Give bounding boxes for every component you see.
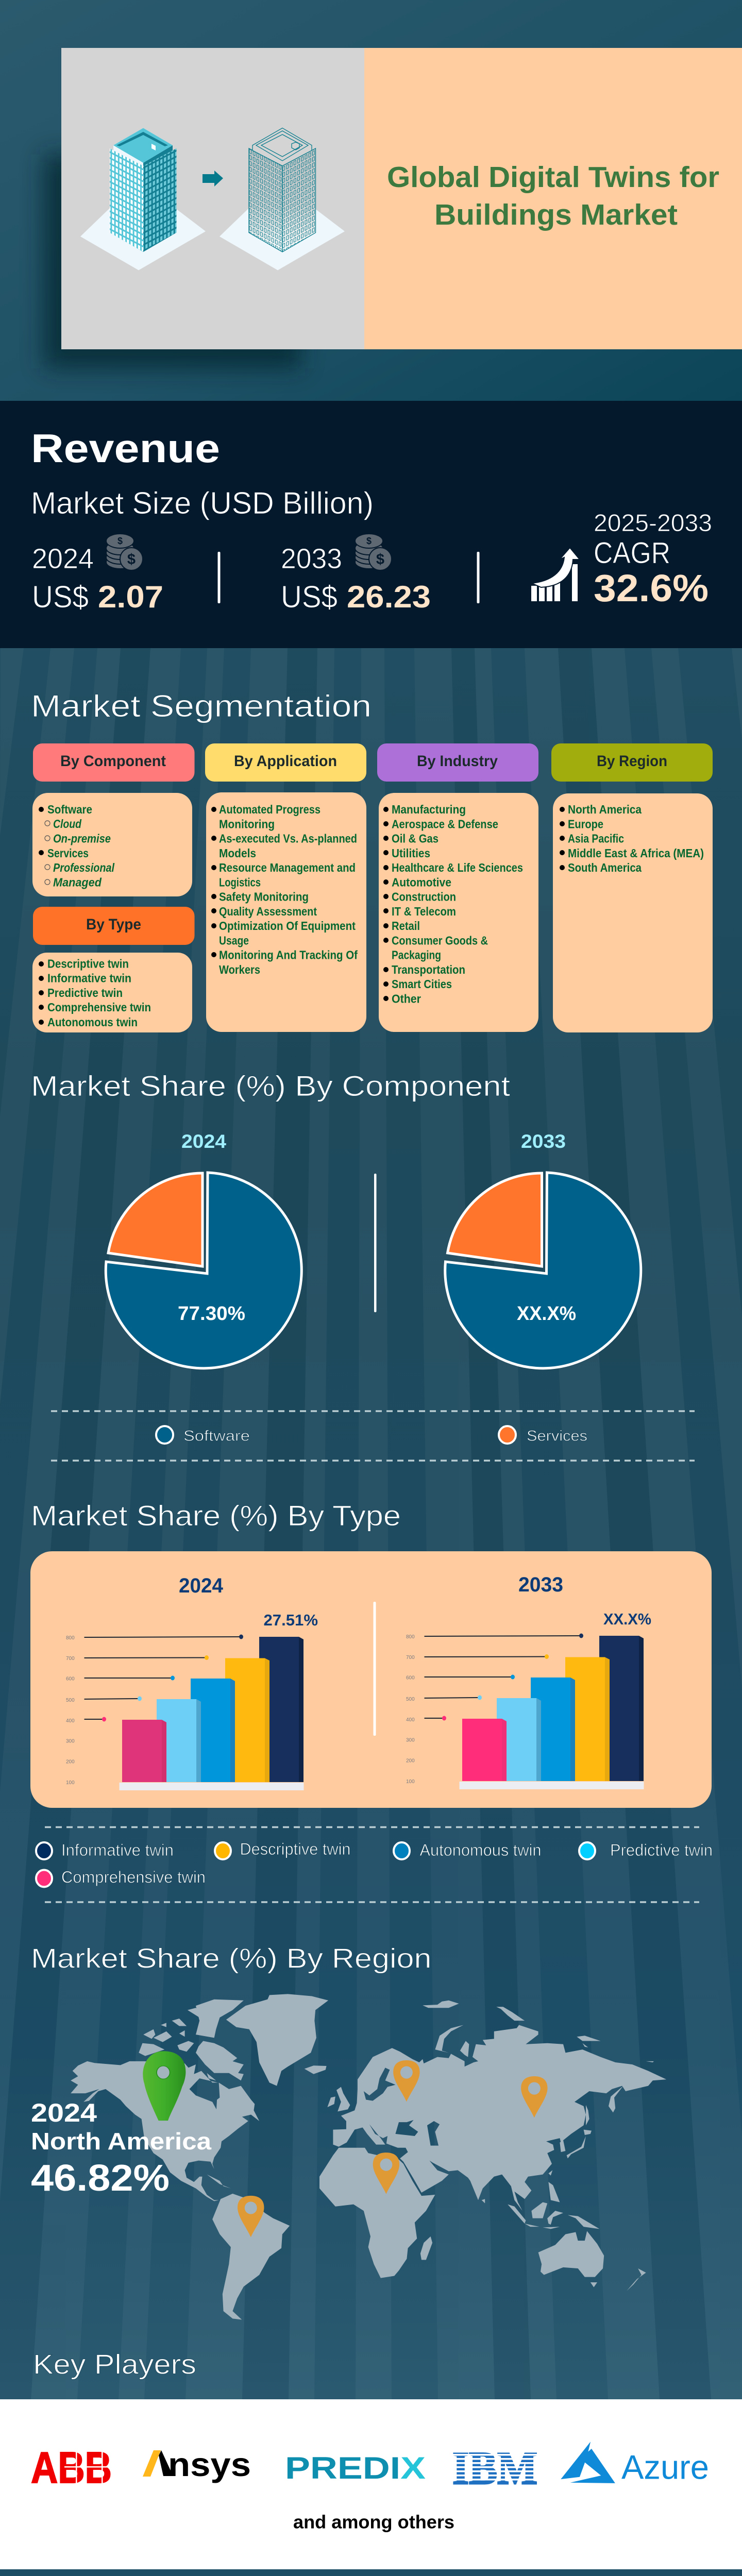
- chart: type bars 2024: 200: [66, 1759, 75, 1765]
- panel: by industry: Construction: [392, 890, 456, 904]
- panel: by component: By Component: [60, 753, 166, 770]
- icon: growth chart: [531, 548, 580, 601]
- panel: by application: Monitoring And Tracking Of: [219, 948, 358, 962]
- panel: by application: Usage: [219, 934, 249, 947]
- panel: by type: Descriptive twin: [47, 957, 129, 971]
- chart: type bars 2033: 400: [406, 1717, 415, 1723]
- panel: by application: Logistics: [219, 875, 261, 889]
- panel: by component: On-premise: [53, 832, 111, 845]
- legend: component: Services: [527, 1428, 587, 1445]
- chart: type bars 2033: XX.X%: [603, 1610, 651, 1628]
- callout: North America share: North America: [31, 2128, 211, 2155]
- heading: revenue: Revenue: [31, 426, 220, 471]
- panel: by application: By Application: [234, 753, 337, 770]
- icon: pin Middle East and Africa: [373, 2153, 399, 2194]
- stat: CAGR: 32.6%: [594, 567, 709, 609]
- panel: by application: Resource Management and: [219, 861, 356, 874]
- legend: type: Informative twin: [61, 1841, 174, 1859]
- map: world: [71, 1994, 666, 2319]
- subheading: market size: Market Size (USD Billion): [31, 486, 374, 520]
- heading: market share by region: Market Share (%) By Region: [31, 1943, 432, 1974]
- panel: by component: Professional: [53, 861, 115, 874]
- panel: by type: Predictive twin: [47, 986, 123, 999]
- stat: 2033: [281, 543, 431, 614]
- stat: 2033: 26.23: [347, 580, 431, 614]
- icon: coins 2024: $: [127, 551, 136, 568]
- chart: type bars 2024: 100: [66, 1780, 75, 1786]
- chart: component pie 2024: [106, 1131, 301, 1368]
- chart: type bars 2024: 2024: [179, 1574, 224, 1597]
- icon: pin Asia: [521, 2076, 548, 2117]
- icon: pin South America: [238, 2196, 264, 2237]
- panel: by industry: Healthcare & Life Sciences: [392, 861, 523, 874]
- panel: by region: North America: [568, 803, 642, 816]
- panel: by industry: [377, 743, 538, 1032]
- panel: by application: Workers: [219, 963, 260, 976]
- chart: component pie 2033: [445, 1131, 641, 1368]
- title: Buildings Market: [434, 198, 678, 231]
- chart: type bars 2024: 800: [66, 1635, 75, 1641]
- title: [387, 161, 719, 231]
- chart: type bars 2033: 300: [406, 1737, 415, 1743]
- panel: by application: Monitoring: [219, 817, 275, 831]
- icon: wireframe building: [220, 128, 345, 270]
- panel: by industry: Automotive: [392, 875, 451, 889]
- panel: by industry: Retail: [392, 919, 420, 933]
- panel: by application: As-executed Vs. As-planned: [219, 832, 357, 845]
- legend: type: [36, 1827, 713, 1902]
- panel: by application: Optimization Of Equipment: [219, 919, 356, 933]
- legend: component: [51, 1411, 695, 1461]
- divider: [374, 1174, 376, 1312]
- panel: by type: Informative twin: [47, 972, 131, 985]
- chart: type bars 2024: 700: [66, 1656, 75, 1662]
- legend: type: Comprehensive twin: [61, 1868, 206, 1887]
- panel: by component: Managed: [53, 875, 102, 889]
- banner shadow: [44, 155, 301, 368]
- panel: by application: Quality Assessment: [219, 905, 317, 918]
- panel: by application: Safety Monitoring: [219, 890, 309, 904]
- heading: key players: Key Players: [33, 2349, 196, 2380]
- chart: type bars 2024: 500: [66, 1698, 75, 1703]
- icon: pin Europe: [393, 2060, 420, 2102]
- callout: North America share: 46.82%: [31, 2158, 170, 2199]
- chart: type bars 2033: 700: [406, 1655, 415, 1660]
- panel: by region: Middle East & Africa (MEA): [568, 846, 704, 860]
- chart: type bars 2024: 300: [66, 1738, 75, 1744]
- panel: by type: [32, 907, 195, 1032]
- chart: type bars 2033: 800: [406, 1634, 415, 1640]
- chart: type bars 2024: 400: [66, 1718, 75, 1724]
- panel: by industry: Other: [392, 992, 421, 1005]
- icon: coins 2033: $: [376, 551, 384, 568]
- Americas and Greenland: [71, 1994, 328, 2319]
- heading: market share by component: Market Share (%) By Component: [31, 1070, 510, 1102]
- hero banner: [44, 48, 742, 368]
- chart: type bars 2033: 100: [406, 1779, 415, 1785]
- panel: by region: By Region: [597, 753, 667, 770]
- panel: by application: [205, 743, 366, 1032]
- panel: by component: Services: [47, 846, 89, 860]
- chart: component pie 2024: 2024: [181, 1131, 226, 1152]
- icon: solid building: [80, 128, 206, 270]
- icon: coins 2033: $: [366, 536, 372, 546]
- icon: coins 2024: [106, 534, 143, 570]
- callout: North America share: [31, 2098, 211, 2199]
- heading: market segmentation: Market Segmentation: [31, 689, 372, 723]
- legend: component: Software: [183, 1428, 250, 1445]
- panel: by type: Comprehensive twin: [47, 1001, 151, 1014]
- divider: [477, 552, 479, 603]
- panel: by region: Europe: [568, 817, 603, 831]
- panel: by type: Autonomous twin: [47, 1015, 138, 1029]
- legend: type: Predictive twin: [610, 1841, 713, 1859]
- stat: 2024: [32, 543, 163, 614]
- panel: by component: Cloud: [53, 817, 82, 831]
- icon: pin North America: [143, 2051, 185, 2121]
- icon: arrow: [203, 171, 223, 187]
- panel: by industry: Consumer Goods &: [392, 934, 488, 947]
- chart: type bars 2033: 2033: [518, 1573, 563, 1596]
- panel: revenue: [0, 401, 742, 648]
- legend: type: Autonomous twin: [419, 1841, 541, 1859]
- panel: by region: [551, 743, 713, 1032]
- chart: type bars 2024: 600: [66, 1676, 75, 1682]
- icon: coins 2024: $: [117, 536, 123, 546]
- panel: by component: [32, 743, 195, 896]
- panel: type charts: [30, 1551, 712, 1808]
- chart: type bars 2033: 200: [406, 1758, 415, 1764]
- panel: by industry: Aerospace & Defense: [392, 817, 498, 831]
- chart: component pie 2033: XX.X%: [517, 1303, 576, 1325]
- panel: by industry: Smart Cities: [392, 977, 452, 991]
- stat: 2024: US$: [32, 580, 89, 614]
- panel: by industry: Packaging: [392, 948, 441, 962]
- panel: by application: Models: [219, 846, 256, 860]
- panel: by region: South America: [568, 861, 642, 874]
- panel: by application: Automated Progress: [219, 803, 321, 816]
- chart: type bars 2033: [406, 1573, 651, 1789]
- divider: [373, 1602, 376, 1736]
- chart: type bars 2024: [66, 1574, 318, 1790]
- chart: component pie 2024: 77.30%: [178, 1303, 245, 1325]
- panel: by industry: Oil & Gas: [392, 832, 439, 845]
- legend: type: Descriptive twin: [240, 1840, 350, 1858]
- logo: Azure: [561, 2442, 709, 2486]
- divider band: [0, 2569, 742, 2576]
- callout: North America share: 2024: [31, 2098, 97, 2127]
- Eurasia, Africa and Oceania: [319, 2001, 666, 2291]
- stat: 2024: 2024: [32, 543, 94, 574]
- title: Global Digital Twins for: [387, 161, 719, 194]
- icon: coins 2033: [355, 534, 392, 570]
- chart: type bars 2033: 600: [406, 1675, 415, 1681]
- panel: by type: By Type: [86, 916, 141, 933]
- logo: IBM: IBM: [452, 2443, 537, 2494]
- stat: CAGR: CAGR: [594, 536, 670, 570]
- panel: by region: Asia Pacific: [568, 832, 624, 845]
- panel: title background: [364, 48, 742, 349]
- panel: building illustration: [61, 48, 364, 349]
- panel: by industry: By Industry: [417, 753, 498, 770]
- panel: by industry: IT & Telecom: [392, 905, 456, 918]
- panel: key player logos: [0, 2399, 742, 2569]
- chart: type bars 2024: 27.51%: [264, 1611, 318, 1629]
- panel: by industry: Transportation: [392, 963, 465, 976]
- logo: ABB: ABB: [31, 2444, 112, 2493]
- panel: by industry: Manufacturing: [392, 803, 466, 816]
- panel: by industry: Utilities: [392, 846, 430, 860]
- chart: type bars 2033: 500: [406, 1697, 415, 1702]
- stat: 2033: US$: [281, 580, 338, 614]
- heading: market share by type: Market Share (%) By Type: [31, 1499, 401, 1532]
- logo: Predix: PREDI X: [285, 2451, 426, 2485]
- panel: by component: Software: [47, 803, 92, 816]
- logo: Azure: Azure: [621, 2448, 709, 2486]
- stat: 2024: 2.07: [98, 580, 163, 614]
- text: and among others: and among others: [293, 2511, 454, 2533]
- stat: 2033: 2033: [281, 543, 342, 574]
- divider: [217, 552, 221, 603]
- stat: CAGR: [594, 509, 712, 609]
- logo: Ansys: nsys: [168, 2446, 251, 2483]
- chart: component pie 2033: 2033: [521, 1131, 566, 1152]
- stat: CAGR: 2025-2033: [594, 509, 712, 536]
